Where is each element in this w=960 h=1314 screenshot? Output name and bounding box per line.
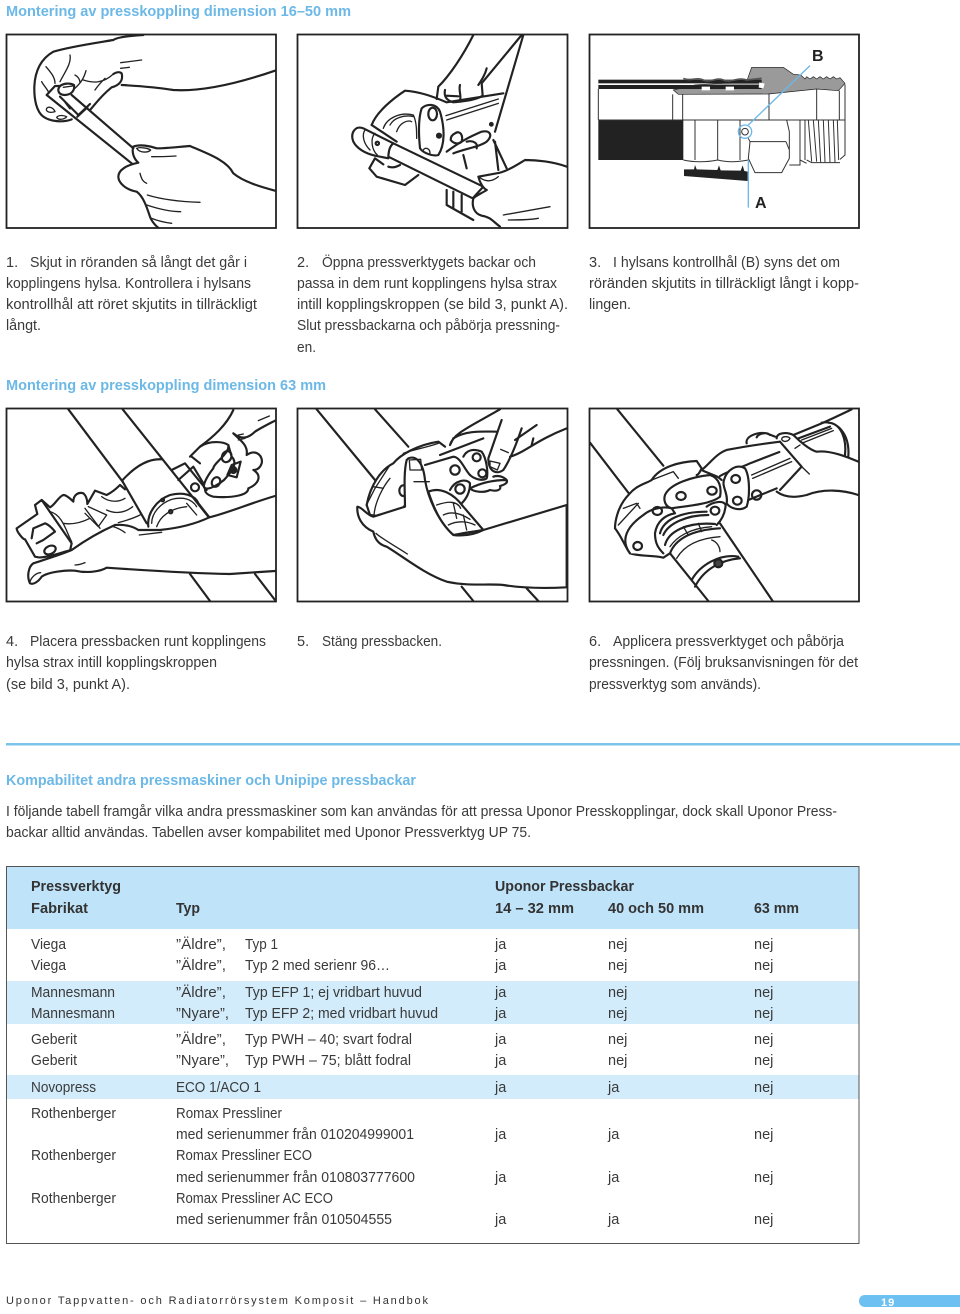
step 2 text: passa in dem runt kopplingens hylsa strax [297,276,558,292]
table rows: nej [754,958,773,974]
step 2 text: 2. [297,255,309,271]
page number tab: 19 [881,1297,895,1309]
step 6 text: 6. [589,634,601,650]
table rows: ”Nyare”, [176,1006,229,1022]
table rows: nej [608,958,627,974]
step 4 text: 4. [6,634,18,650]
pipe layers black [598,78,765,90]
table rows: Romax Pressliner [176,1106,282,1122]
table rows: Typ EFP 2; med vridbart huvud [245,1006,438,1022]
step 5 text: Stäng pressbacken. [322,634,442,650]
table rows: nej [754,1053,773,1069]
table rows: ja [607,1127,620,1143]
table rows: ja [494,1053,507,1069]
step 1 text: kontrollhål att röret skjutits in tillräckligt [6,297,257,313]
compatibility table [6,866,859,1244]
footer title: Uponor Tappvatten- och Radiatorrörsystem Komposit – Handbok [6,1295,429,1307]
step 1 text [6,255,257,334]
table rows: nej [754,1170,773,1186]
table rows: Romax Pressliner ECO [176,1148,312,1164]
table rows: ja [607,1080,620,1096]
step 6 text: pressningen. (Följ bruksanvisningen för det [589,655,858,671]
intro paragraph: backar alltid användas. Tabellen avser kompabilitet med Uponor Pressverktyg UP 75. [6,825,531,841]
panel: step 6 illustration [590,408,859,602]
table rows: ”Äldre”, [176,1031,226,1048]
step 2 text: intill kopplingskroppen (se bild 3, punkt A). [297,297,568,313]
table rows: med serienummer från 010204999001 [176,1127,414,1143]
table rows: nej [754,1032,773,1048]
table header: 14 – 32 mm [495,901,574,917]
table rows: ECO 1/ACO 1 [176,1080,261,1096]
panel: step 1 illustration [6,34,276,228]
table rows: Geberit [31,1053,77,1069]
table rows: Viega [31,937,67,953]
step 2 text: Öppna pressverktygets backar och [322,253,536,271]
step 1 text: Skjut in röranden så långt det går i [30,255,247,271]
table rows: Rothenberger [31,1191,116,1207]
label A: A [755,195,767,212]
heading: dimension 63 mm: Montering av presskoppling dimension 63 mm [6,377,326,394]
table rows: Mannesmann [31,985,115,1001]
table header: Uponor Pressbackar [495,879,634,895]
step 3 text: I hylsans kontrollhål (B) syns det om [613,255,840,271]
table rows: nej [608,1032,627,1048]
table rows: med serienummer från 010803777600 [176,1170,415,1186]
table rows: ja [494,958,507,974]
table rows: nej [754,1006,773,1022]
step 3 text [589,255,859,313]
table rows: ja [494,1170,507,1186]
table rows: ”Äldre”, [176,957,226,974]
table background bands [6,866,859,1244]
table rows: Typ 1 [245,937,278,953]
table rows: nej [608,937,627,953]
panel: step 3 fitting cross-section [590,34,859,228]
table rows: Novopress [31,1080,96,1096]
table rows: nej [754,1127,773,1143]
heading: compatibility: Kompabilitet andra pressmaskiner och Unipipe pressbackar [6,772,416,789]
step 3 text: röränden skjutits in tillräckligt långt i kopp- [589,276,859,292]
step 1 text: kopplingens hylsa. Kontrollera i hylsans [6,276,251,292]
table rows: nej [608,1053,627,1069]
table rows: nej [608,985,627,1001]
table rows: Viega [31,958,67,974]
table rows [31,936,773,1228]
table rows: Rothenberger [31,1148,116,1164]
step 2 text: en. [297,340,316,356]
table rows: Typ PWH – 40; svart fodral [245,1032,412,1048]
step 6 text: Applicera pressverktyget och påbörja [613,634,845,650]
heading: dimension 16-50 mm: Montering av presskoppling dimension 16–50 mm [6,3,351,20]
fitting gray body [673,67,845,94]
intro paragraph [6,804,837,841]
label B: B [812,48,824,65]
intro paragraph: I följande tabell framgår vilka andra pressmaskiner som kan användas för att pressa Uponor Presskopplingar, dock skall Uponor Press- [6,804,837,820]
step 4 text: (se bild 3, punkt A). [6,677,130,693]
step 2 text: Slut pressbackarna och påbörja pressning- [297,318,560,334]
step 4 text [6,634,266,693]
table rows: ja [494,1080,507,1096]
step 5 text: 5. [297,634,309,650]
table rows: ”Nyare”, [176,1053,229,1069]
page number tab [859,1295,960,1309]
step 3 text: lingen. [589,297,631,313]
table rows: ”Äldre”, [176,936,226,953]
table rows: Mannesmann [31,1006,115,1022]
table rows: nej [608,1006,627,1022]
step 6 text: pressverktyg som används). [589,677,761,693]
table header [31,879,799,917]
table header: Pressverktyg [31,879,121,895]
step 3 text: 3. [589,255,601,271]
panel: step 5 illustration [298,408,568,602]
table rows: med serienummer från 010504555 [176,1212,392,1228]
table rows: nej [754,1080,773,1096]
table rows: nej [754,1212,773,1228]
table rows: ja [494,1032,507,1048]
table rows: nej [754,937,773,953]
table rows: ja [494,1006,507,1022]
panel: step 2 illustration [298,34,568,228]
table rows: ja [607,1212,620,1228]
step 1 text: långt. [6,318,41,334]
table rows: Typ EFP 1; ej vridbart huvud [245,985,422,1001]
step 2 text [297,253,568,356]
step 1 text: 1. [6,255,18,271]
table header: 63 mm [754,901,799,917]
table rows: ja [494,985,507,1001]
table rows: ”Äldre”, [176,984,226,1001]
step 4 text: hylsa strax intill kopplingskroppen [6,655,217,671]
table rows: ja [494,1212,507,1228]
table rows: Typ PWH – 75; blått fodral [245,1053,411,1069]
table rows: Rothenberger [31,1106,116,1122]
table rows: Typ 2 med serienr 96… [245,958,390,974]
table rows: ja [607,1170,620,1186]
table rows: Geberit [31,1032,77,1048]
table header: Typ [176,901,200,917]
table rows: Romax Pressliner AC ECO [176,1191,333,1207]
table header: 40 och 50 mm [608,901,704,917]
step 4 text: Placera pressbacken runt kopplingens [30,634,266,650]
table rows: nej [754,985,773,1001]
table header: Fabrikat [31,901,88,917]
panel: step 4 illustration [6,408,276,602]
table rows: ja [494,937,507,953]
table rows: ja [494,1127,507,1143]
leader lines to A and B [738,66,810,208]
step 6 text [589,634,858,693]
